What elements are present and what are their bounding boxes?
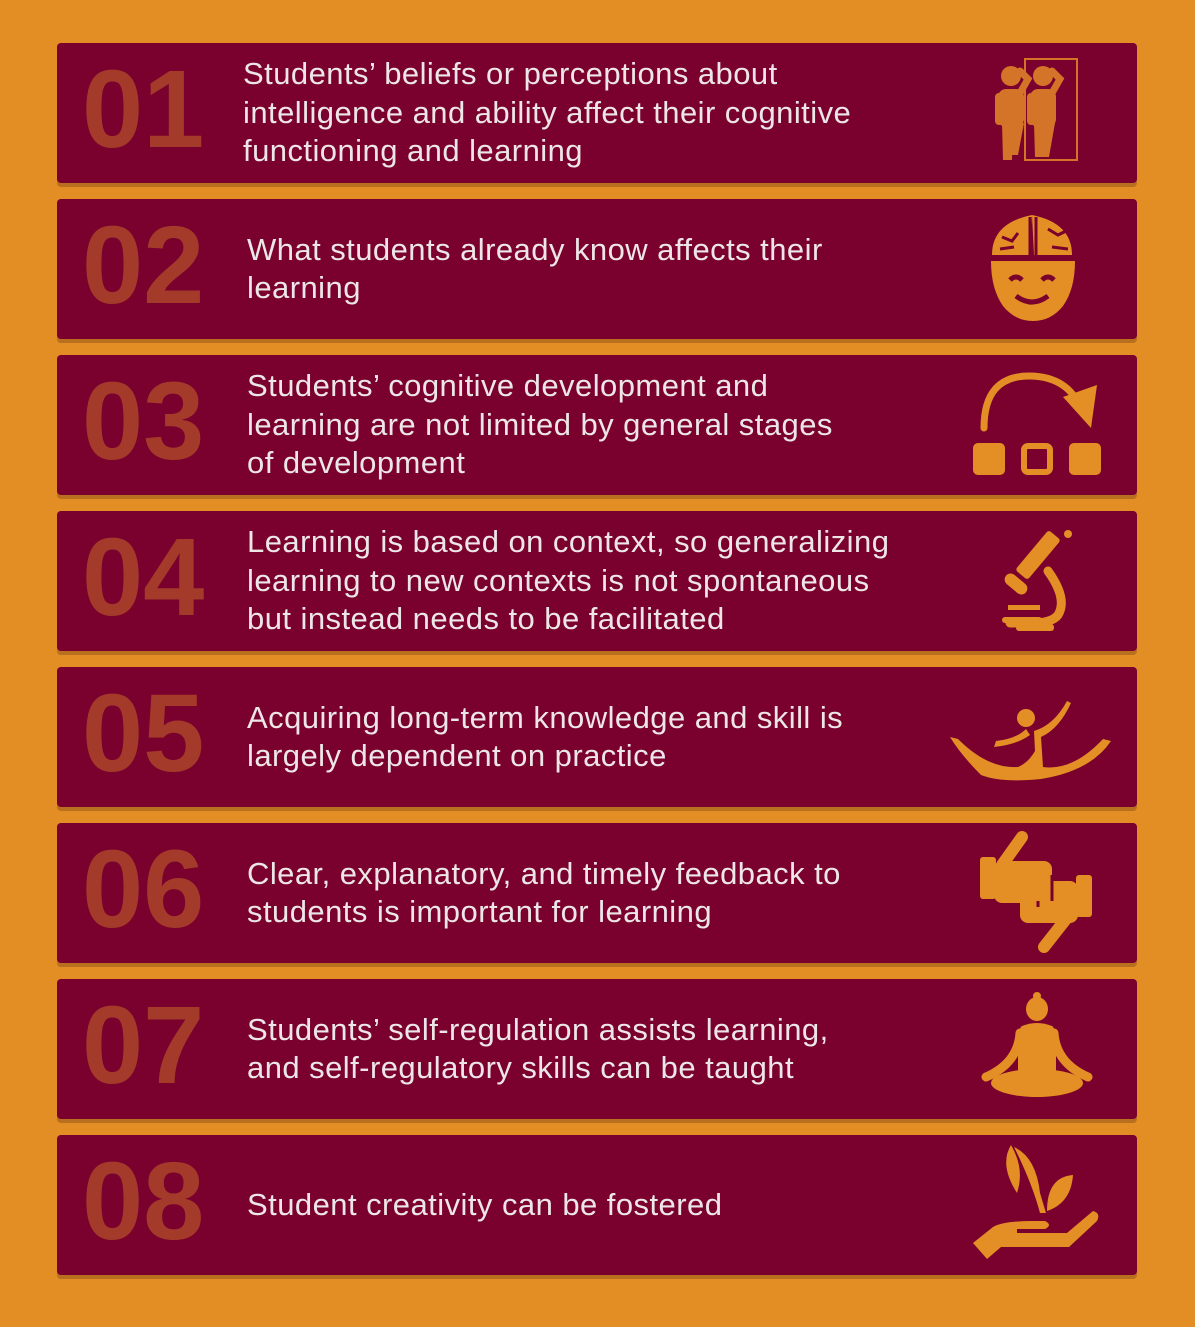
text 01: intelligence and ability affect their cognitive [243,95,851,130]
icon: microscope [1002,530,1072,631]
number 03: 03 [82,360,204,483]
number 04: 04 [82,516,204,639]
text 01 [243,56,851,168]
panel: 08 [57,1135,1137,1275]
text 04 [247,524,889,636]
icon: thumbs up/down [980,831,1092,953]
text 06 [247,856,841,929]
panel: 04 [57,511,1137,651]
text 08: Student creativity can be fostered [247,1187,722,1222]
number 01: 01 [82,48,204,171]
icon: brain face [991,215,1075,321]
icon: stages arrow [973,372,1101,475]
icon: meditation [982,992,1092,1097]
icon: mirror people [995,58,1078,161]
number 02: 02 [82,204,204,327]
text 03: learning are not limited by general stages [247,407,833,442]
text 07: and self-regulatory skills can be taught [247,1050,794,1085]
text 04: learning to new contexts is not spontaneous [247,563,870,598]
number 07: 07 [82,984,204,1107]
text 03 [247,368,833,480]
text 07 [247,1012,829,1085]
panel: 06 [57,823,1137,963]
panel: 05 [57,667,1137,807]
panel: 01 [57,43,1137,183]
number 08: 08 [82,1140,204,1263]
number 05: 05 [82,672,204,795]
text 06: students is important for learning [247,894,712,929]
text 07: Students’ self-regulation assists learning, [247,1012,829,1046]
text 01: Students’ beliefs or perceptions about [243,56,778,91]
panel: 02 [57,199,1137,339]
text 04: Learning is based on context, so generalizing [247,524,889,559]
number 06: 06 [82,828,204,951]
text 05: largely dependent on practice [247,738,667,773]
text 02: learning [247,270,361,305]
text 04: but instead needs to be facilitated [247,601,725,636]
text 03: Students’ cognitive development and [247,368,768,403]
text 02 [247,232,823,305]
icon: plant in hand [973,1145,1098,1259]
text 03: of development [247,445,465,480]
text 02: What students already know affects their [247,232,823,266]
text 06: Clear, explanatory, and timely feedback to [247,856,841,890]
text 01: functioning and learning [243,133,583,168]
icon: dancer [950,701,1111,780]
text 05 [247,700,843,773]
text 05: Acquiring long-term knowledge and skill is [247,700,843,734]
panel: 07 [57,979,1137,1119]
panel: 03 [57,355,1137,495]
